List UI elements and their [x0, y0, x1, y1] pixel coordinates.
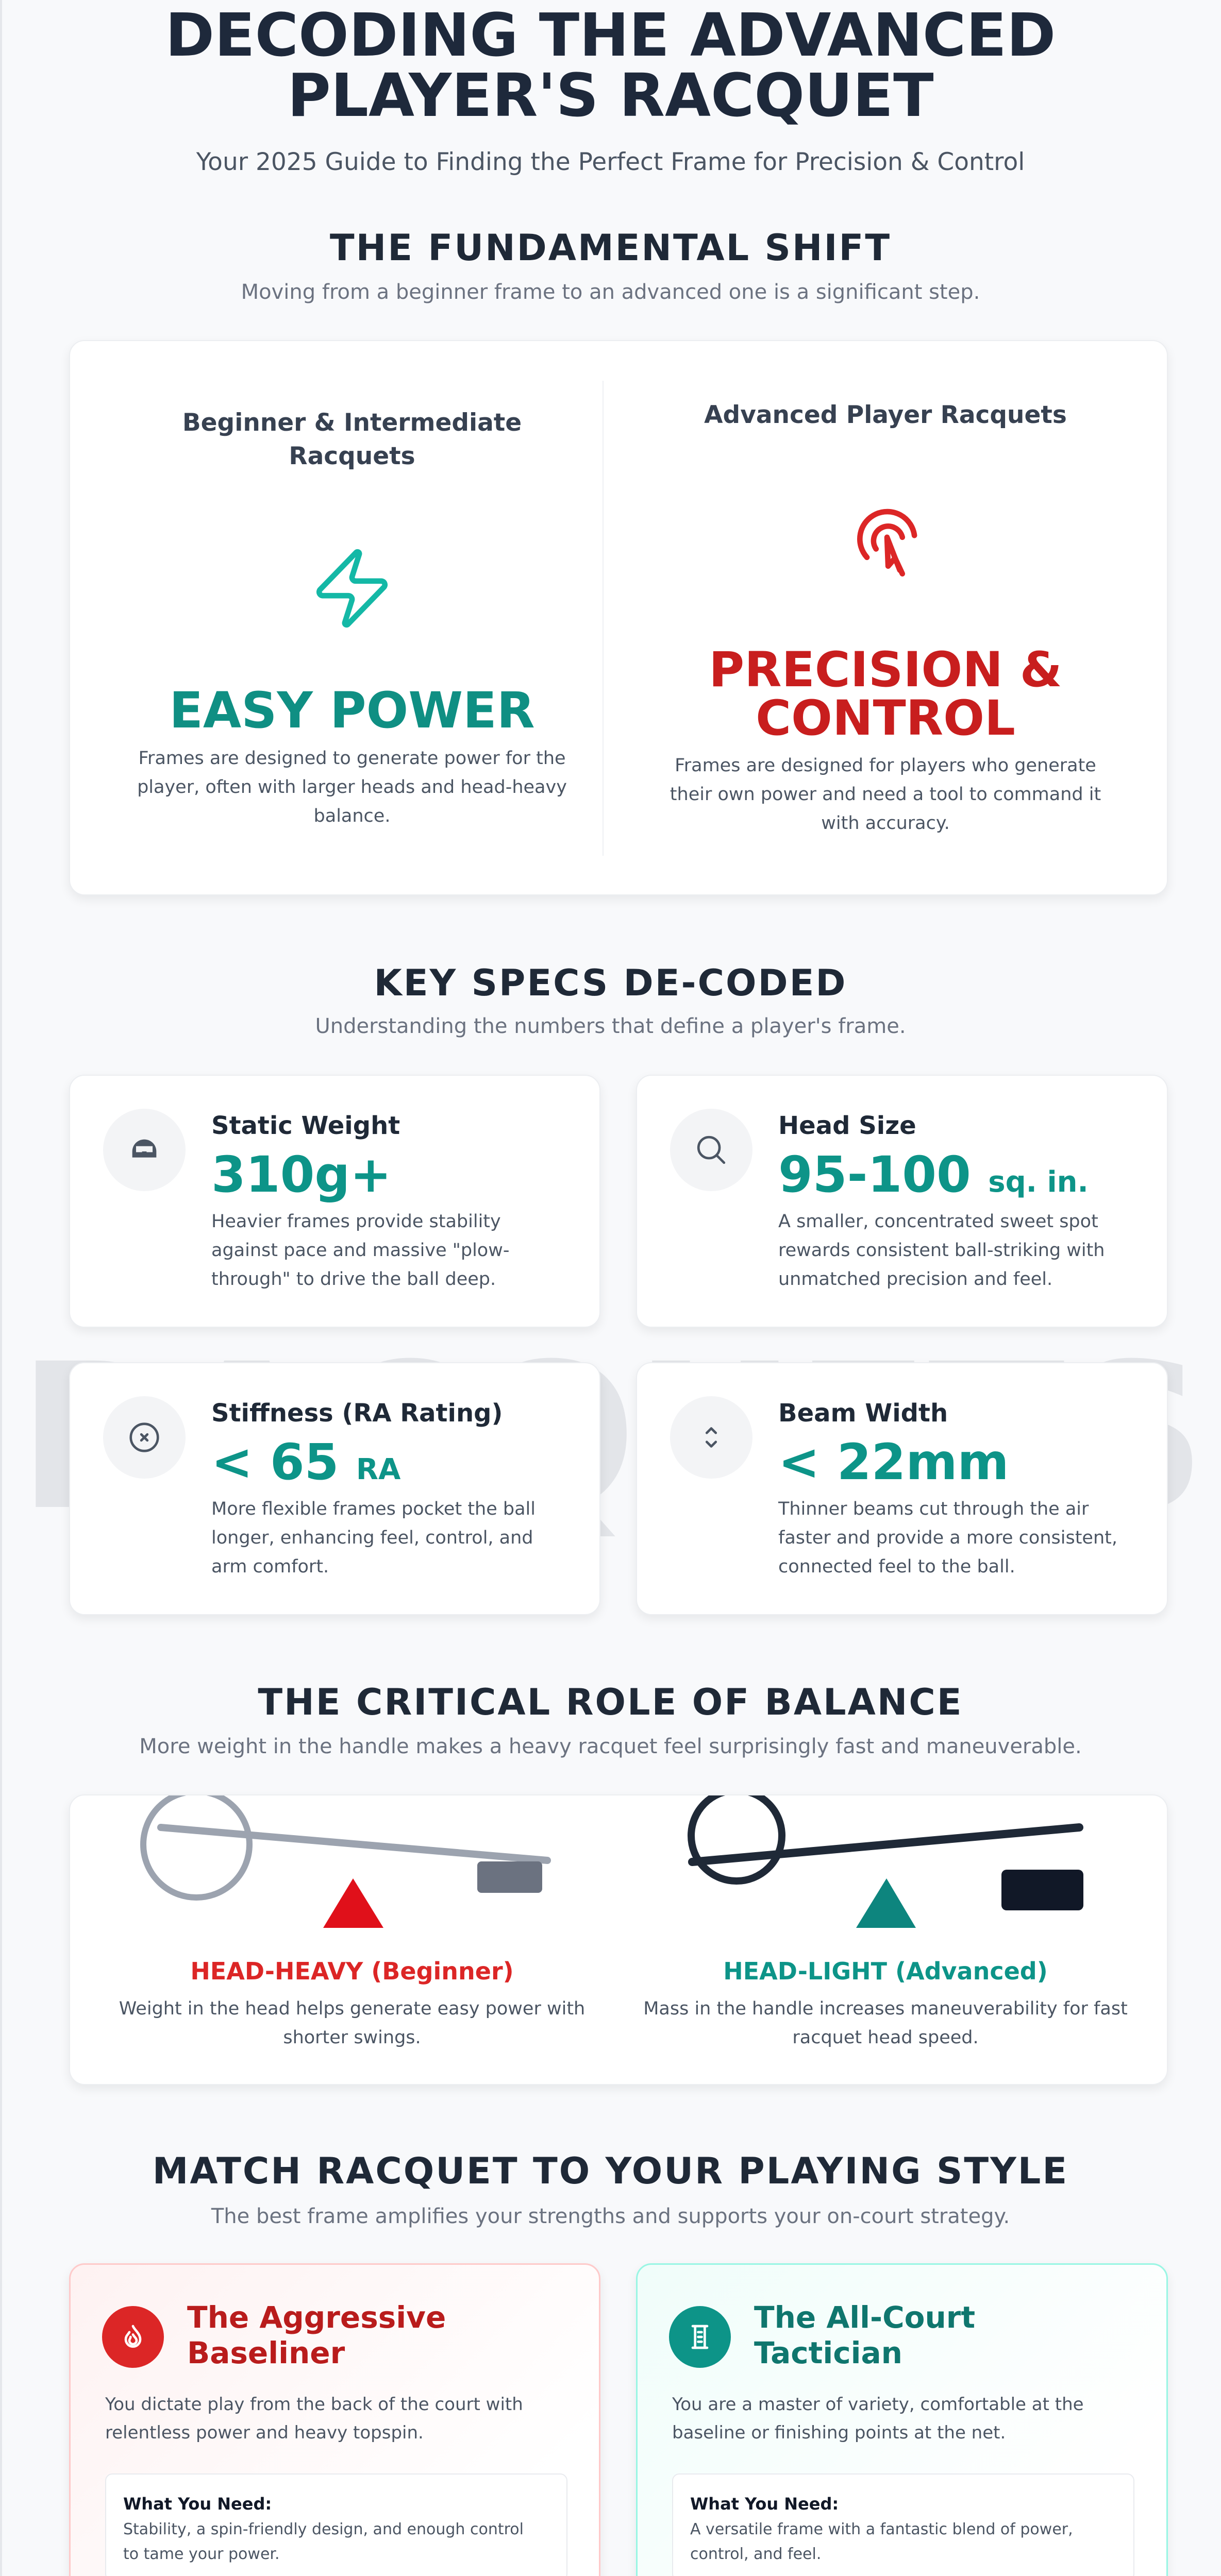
card: beam width: [636, 1362, 1168, 1615]
title: [754, 2300, 975, 2370]
description: relentless power and heavy topspin.: [105, 2422, 424, 2443]
right description: Frames are designed for players who generate: [675, 755, 1096, 776]
title: [165, 1, 1056, 130]
card: static weight: Heavier frames provide stability: [211, 1211, 501, 1232]
precision & control label: PRECISION &: [709, 642, 1062, 698]
desc: head-heavy: Weight in the head helps generate easy power with: [119, 1998, 585, 2019]
left column heading: [182, 409, 522, 470]
card: stiffness: arm comfort.: [211, 1556, 329, 1577]
desc: head-heavy: [119, 1998, 585, 2048]
title: Baseliner: [187, 2335, 345, 2370]
icon: chevrons: [670, 1396, 752, 1479]
box: what you need: [672, 2473, 1134, 2576]
description: You dictate play from the back of the court with: [105, 2394, 523, 2415]
right column heading: Advanced Player Racquets: [704, 401, 1067, 429]
left column heading: Racquets: [289, 442, 415, 470]
watermark text: RACQUETS: [18, 1320, 1203, 1554]
card: static weight: through" to drive the ball deep.: [211, 1269, 496, 1290]
box: what you need: to tame your power.: [123, 2545, 280, 2563]
card: beam width: < 22mm: [778, 1433, 1009, 1491]
title: DECODING THE ADVANCED: [165, 1, 1056, 70]
subtitle: Your 2025 Guide to Finding the Perfect Frame for Precision & Control: [196, 148, 1025, 176]
easy power label: EASY POWER: [169, 682, 535, 739]
box: what you need: What You Need:: [690, 2494, 839, 2514]
card: beam width: Thinner beams cut through the air: [778, 1499, 1089, 1519]
desc: head-light: Mass in the handle increases maneuverability for fast: [643, 1998, 1128, 2019]
card: static weight: Static Weight: [211, 1111, 400, 1140]
card: stiffness: Stiffness (RA Rating): [211, 1399, 503, 1428]
box: what you need: A versatile frame with a fantastic blend of power,: [690, 2520, 1073, 2538]
left description: balance.: [314, 806, 390, 826]
subheading: Moving from a beginner frame to an advanced one is a significant step.: [241, 280, 980, 304]
icon: circle x: [103, 1396, 186, 1479]
card: head size: [636, 1075, 1168, 1328]
description: baseline or finishing points at the net.: [672, 2422, 1006, 2443]
icon: lightning bolt: [316, 549, 388, 628]
icon: target pointer: [857, 509, 917, 577]
right description: [670, 755, 1101, 834]
left column heading: Beginner & Intermediate: [182, 409, 522, 437]
card: stiffness: More flexible frames pocket the ball: [211, 1499, 536, 1519]
heading: playing style: MATCH RACQUET TO YOUR PLAYING STYLE: [153, 2150, 1068, 2192]
heading: key specs: KEY SPECS DE-CODED: [374, 962, 847, 1004]
card: head size: Head Size: [778, 1111, 916, 1140]
card: static weight: against pace and massive "plow-: [211, 1240, 509, 1261]
card: head size: 95-100 sq. in.: [778, 1146, 1089, 1204]
left description: Frames are designed to generate power for the: [138, 748, 566, 769]
card: beam width: faster and provide a more consistent,: [778, 1528, 1117, 1548]
box: what you need: control, and feel.: [690, 2545, 821, 2563]
card: head size: rewards consistent ball-striking with: [778, 1240, 1105, 1261]
icon: weight: [103, 1109, 186, 1191]
card: static weight: 310g+: [211, 1146, 392, 1204]
panel: all-court tactician: [636, 2263, 1168, 2576]
desc: head-heavy: shorter swings.: [283, 2027, 421, 2048]
desc: head-light: racquet head speed.: [792, 2027, 979, 2048]
right description: with accuracy.: [821, 813, 950, 834]
icon: flame: [102, 2306, 164, 2368]
precision & control label: CONTROL: [756, 690, 1015, 747]
card: stiffness: < 65 RA: [211, 1433, 400, 1491]
box: what you need: What You Need:: [123, 2494, 272, 2514]
description: [672, 2394, 1084, 2443]
diagram: head-heavy: [140, 1795, 551, 1928]
icon: magnifier: [670, 1109, 752, 1191]
panel: balance: [69, 1794, 1168, 2085]
left description: [137, 748, 567, 826]
left description: player, often with larger heads and head-heavy: [137, 777, 567, 798]
description: You are a master of variety, comfortable at the: [672, 2394, 1084, 2415]
title: Tactician: [754, 2335, 902, 2370]
heading: balance: THE CRITICAL ROLE OF BALANCE: [258, 1681, 963, 1723]
precision & control label: [709, 642, 1062, 747]
right description: their own power and need a tool to command it: [670, 784, 1101, 805]
card: stiffness: longer, enhancing feel, control, and: [211, 1528, 533, 1548]
title: [187, 2300, 446, 2370]
title: The All-Court: [754, 2300, 975, 2335]
subheading: The best frame amplifies your strengths and supports your on-court strategy.: [211, 2205, 1010, 2228]
card: head size: unmatched precision and feel.: [778, 1269, 1052, 1290]
diagram: head-light: [688, 1795, 1083, 1928]
title: The Aggressive: [187, 2300, 446, 2335]
card: beam width: Beam Width: [778, 1399, 948, 1428]
card: static weight: [69, 1075, 600, 1328]
label: head-light: HEAD-LIGHT (Advanced): [723, 1957, 1048, 1985]
box: what you need: [105, 2473, 567, 2576]
subheading: Understanding the numbers that define a player's frame.: [315, 1014, 906, 1038]
subheading: More weight in the handle makes a heavy racquet feel surprisingly fast and maneuverable.: [139, 1735, 1082, 1758]
card: stiffness: [69, 1362, 600, 1615]
icon: column: [669, 2306, 731, 2368]
card: beam width: connected feel to the ball.: [778, 1556, 1015, 1577]
title: PLAYER'S RACQUET: [287, 61, 934, 130]
panel: aggressive baseliner: [69, 2263, 600, 2576]
card: head size: A smaller, concentrated sweet spot: [778, 1211, 1098, 1232]
box: what you need: Stability, a spin-friendly design, and enough control: [123, 2520, 524, 2538]
label: head-heavy: HEAD-HEAVY (Beginner): [190, 1957, 514, 1985]
heading: the fundamental shift: THE FUNDAMENTAL SHIFT: [330, 227, 891, 269]
panel: fundamental shift comparison: [69, 340, 1168, 895]
description: [105, 2394, 523, 2443]
desc: head-light: [643, 1998, 1128, 2048]
